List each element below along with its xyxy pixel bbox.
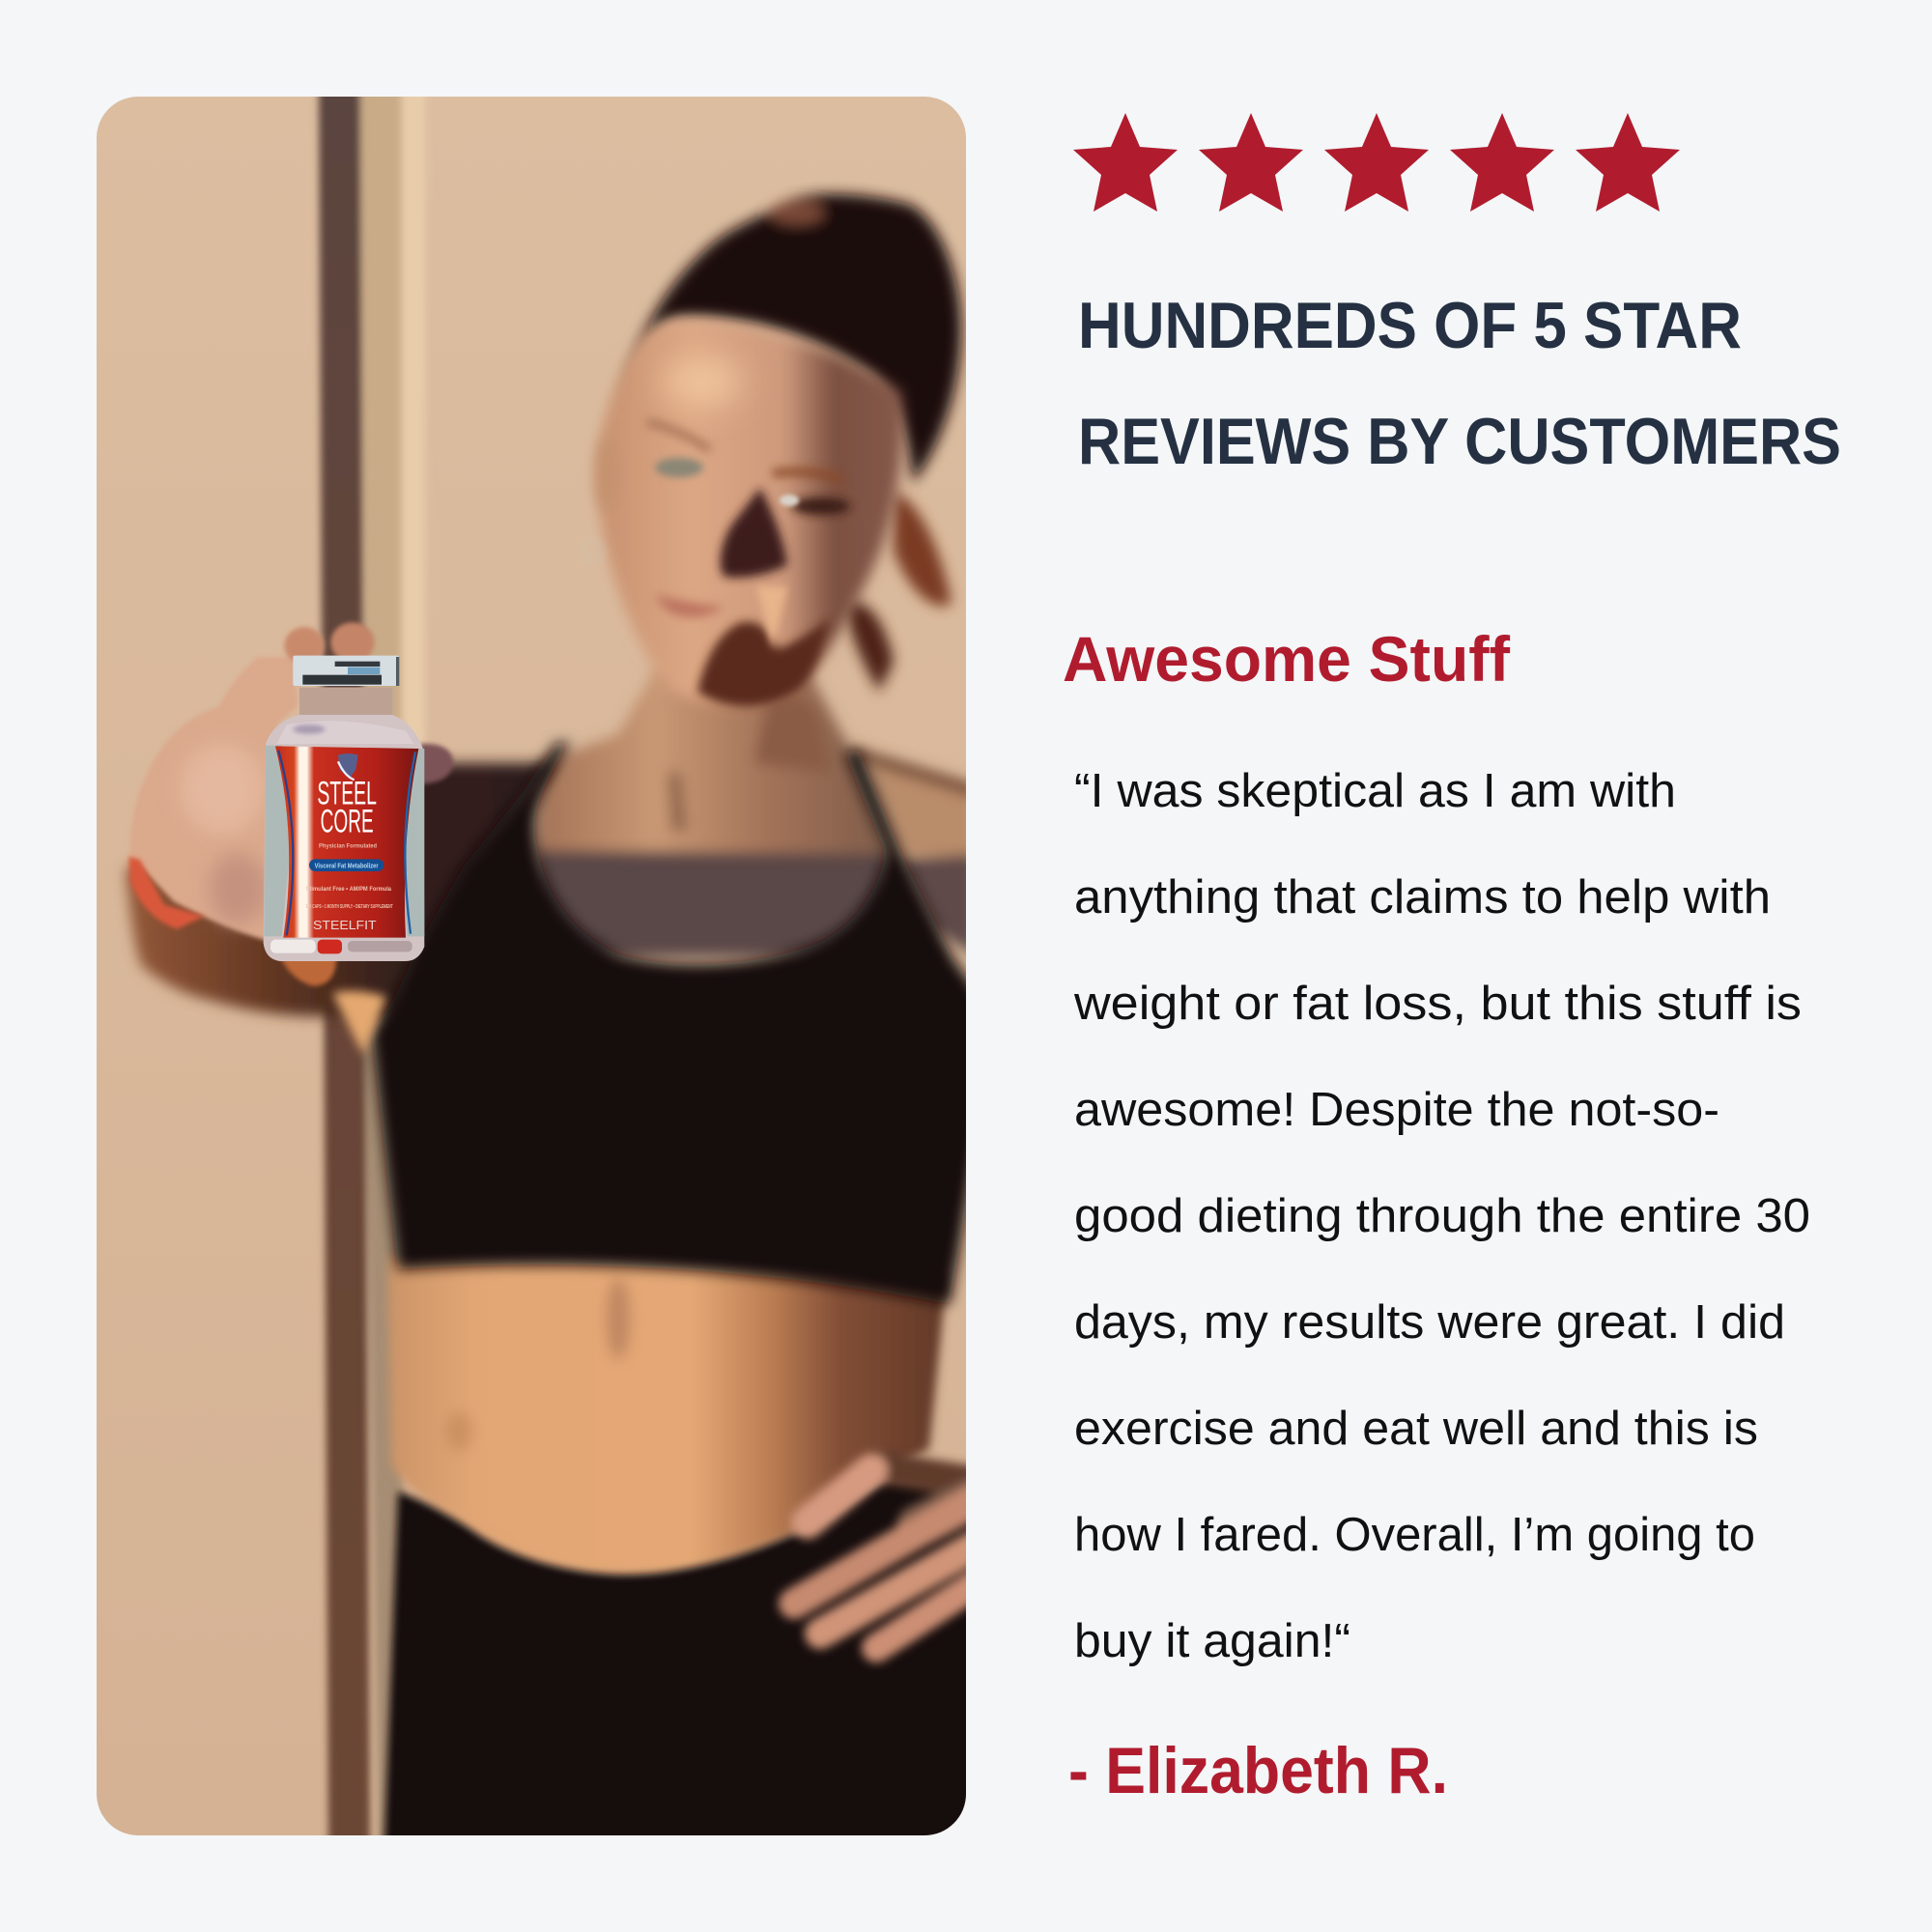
bottle label text: Physician Formulated <box>319 843 377 850</box>
nose highlight <box>756 586 787 649</box>
review quote: buy it again!“ <box>1074 1615 1350 1667</box>
shorts <box>384 1478 980 1845</box>
eyes and brows <box>647 422 710 450</box>
bottle label text: Visceral Fat Metabolizer <box>315 861 379 869</box>
hair <box>621 194 961 692</box>
lower face shadow <box>697 618 831 706</box>
forehead highlight <box>664 356 741 407</box>
wall background <box>97 97 966 1835</box>
earring <box>582 542 602 561</box>
heading: HUNDREDS OF 5 STAR <box>1078 289 1742 362</box>
bottle label text: Stimulant Free • AM/PM Formula <box>306 886 391 893</box>
abdomen <box>388 1256 947 1575</box>
bottle glass <box>264 688 424 961</box>
lips <box>654 594 724 617</box>
reviewer name: - Elizabeth R. <box>1068 1734 1448 1807</box>
bottle cap <box>293 656 399 686</box>
sports bra <box>372 742 980 1304</box>
face <box>582 319 903 706</box>
neck and chest skin <box>536 667 894 956</box>
bottle label text: STEEL <box>317 775 377 811</box>
hand <box>130 622 453 986</box>
capsules <box>270 940 412 953</box>
review quote: awesome! Despite the not-so- <box>1074 1084 1719 1136</box>
nose shadow <box>721 488 787 578</box>
logo shield <box>338 753 358 780</box>
bottle silver side wrap <box>264 746 424 936</box>
review quote: weight or fat loss, but this stuff is <box>1073 978 1802 1030</box>
bottle red label <box>275 746 418 938</box>
bottle label text: STEELFIT <box>313 919 377 932</box>
heading <box>1078 289 1841 478</box>
hand on hip <box>794 1468 976 1648</box>
light patch by underarm <box>332 991 386 1055</box>
bottle label text: 120 CAPS • 1 MONTH SUPPLY • DIETARY SUPPLEMENT <box>306 904 393 910</box>
five star rating <box>1073 113 1680 212</box>
forearm and shoulder in shadow <box>126 763 553 1019</box>
wall stripes <box>319 87 425 1845</box>
wristband <box>128 857 205 929</box>
heading: REVIEWS BY CUSTOMERS <box>1078 405 1841 478</box>
right shoulder <box>850 746 976 956</box>
review quote: good dieting through the entire 30 <box>1074 1190 1810 1242</box>
review quote: anything that claims to help with <box>1074 871 1771 923</box>
review quote: exercise and eat well and this is <box>1074 1403 1758 1455</box>
review quote: how I fared. Overall, I’m going to <box>1074 1509 1755 1561</box>
review title: Awesome Stuff <box>1063 623 1511 695</box>
supplement bottle <box>264 656 424 961</box>
review quote: “I was skeptical as I am with <box>1074 765 1676 817</box>
review quote: days, my results were great. I did <box>1074 1296 1785 1349</box>
bottle label text <box>306 775 393 932</box>
bottle label text: CORE <box>321 804 374 840</box>
review quote <box>1073 765 1810 1667</box>
ear <box>589 439 608 506</box>
panel: product photo of woman holding bottle <box>97 97 966 1835</box>
arm and hand with bottle <box>128 622 453 986</box>
